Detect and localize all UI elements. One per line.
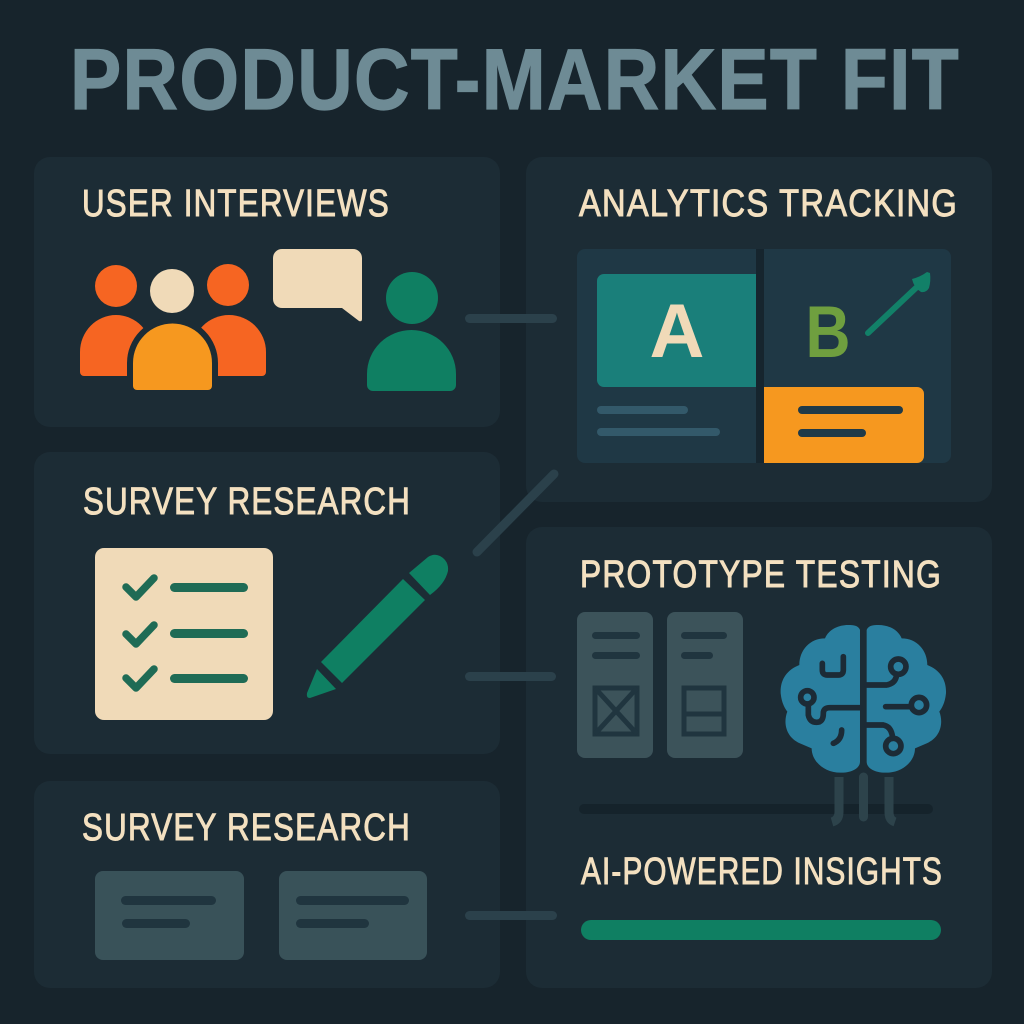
icon: pen [307,555,448,698]
icon: checklist [95,548,273,720]
panel: survey research (lower) [34,781,500,988]
heading: survey research: SURVEY RESEARCH [83,481,411,523]
wireframe card 1 [577,612,653,758]
icon: interviewee [367,272,456,391]
text lines A [597,406,720,436]
connector: lower survey to insights [465,911,557,920]
icon: upward arrow [868,272,930,333]
card 1 [95,871,244,960]
progress bar [581,920,941,940]
icon: interview group [80,264,266,390]
orange callout [764,387,924,463]
panel: prototype testing and AI insights [526,527,992,988]
variant A: A [650,289,704,374]
connector: diagonal [477,474,554,552]
wireframe card 2 [667,612,743,758]
heading: prototype testing: PROTOTYPE TESTING [580,554,942,596]
variant B: B [806,292,850,373]
panel: user interviews [34,157,500,427]
variant A [597,274,756,387]
divider bar [579,804,933,814]
icon: speech bubble [273,249,362,321]
card 2 [279,871,427,960]
connector: survey to prototype [465,672,556,681]
icon: brain legs [832,777,895,822]
heading: survey research lower: SURVEY RESEARCH [82,807,411,849]
panel: survey research [34,452,500,754]
icon: AI brain [781,625,946,773]
heading: analytics tracking: ANALYTICS TRACKING [579,183,958,225]
A/B test board [577,249,951,463]
panel: analytics tracking [526,157,992,502]
connector: interviews to analytics [465,314,557,323]
heading: user interviews: USER INTERVIEWS [82,183,390,225]
